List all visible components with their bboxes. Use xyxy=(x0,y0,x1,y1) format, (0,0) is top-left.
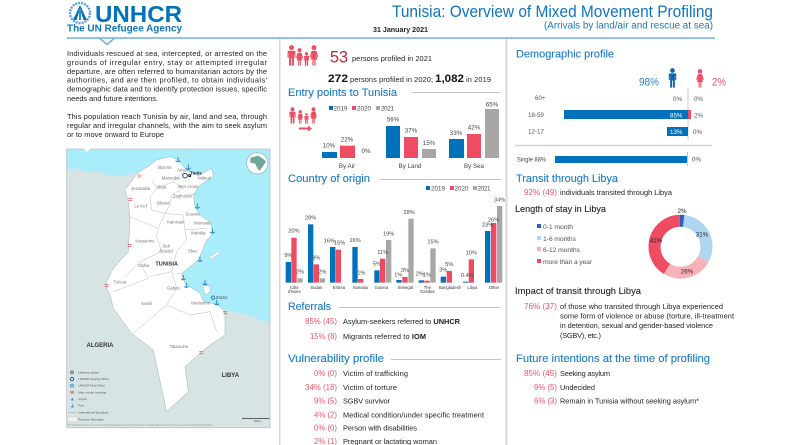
map legend: UNHCR Field Office xyxy=(78,384,105,388)
heading: country of origin: Country of origin xyxy=(288,173,370,185)
list: future intentions xyxy=(524,369,699,406)
list: vulnerability profile: Medical condition/under specific treatment xyxy=(343,410,484,420)
list: referrals: Asylum-seekers referred to UNHCR xyxy=(343,317,461,326)
map labels: Bizerte xyxy=(158,165,172,170)
map frame xyxy=(67,149,270,428)
list: referrals: Migrants referred to IOM xyxy=(343,332,426,341)
map island xyxy=(203,251,219,295)
map legend: Main border crossing xyxy=(78,390,107,394)
chart: demographic profile: 12-17 xyxy=(528,128,544,136)
bar chart: country of origin: 1% xyxy=(423,273,431,279)
bar chart: country of origin: 20% xyxy=(288,229,300,235)
map labels: Sidi xyxy=(162,243,170,248)
bar chart: country of origin: 3% xyxy=(439,268,447,274)
map labels: Gafsa xyxy=(138,263,150,268)
bar chart: entry points: 0% xyxy=(362,148,371,155)
legend: length of stay: more than a year xyxy=(543,259,593,266)
map labels: Siliana xyxy=(156,201,170,206)
bar chart: country of origin: 0.4% xyxy=(461,273,474,279)
donut chart: length of stay: 31% xyxy=(696,232,709,238)
map labels: LIBYA xyxy=(222,373,240,379)
legend: length of stay xyxy=(537,224,593,266)
legend: country of origin xyxy=(426,186,491,192)
list: vulnerability profile xyxy=(305,369,484,445)
bar chart: country of origin: 19% xyxy=(383,231,394,237)
list: vulnerability profile: 0% (0) xyxy=(314,369,337,378)
bar chart: country of origin: 28% xyxy=(403,210,415,216)
text: impact of transit: 76% (37) xyxy=(524,302,557,311)
list: future intentions: Undecided xyxy=(560,383,595,392)
donut chart: length of stay: 2% xyxy=(678,208,687,215)
donut chart: length of stay xyxy=(650,208,709,276)
bar chart: country of origin: d'Ivoire xyxy=(288,289,302,294)
bar chart: entry points xyxy=(322,102,499,170)
bar chart: country of origin: Guinea xyxy=(375,285,389,290)
bar chart: entry points: 56% xyxy=(387,116,400,124)
heading: impact of transit: Impact of transit through Libya xyxy=(515,286,642,297)
bar chart: country of origin: Libya xyxy=(467,285,478,290)
list: vulnerability profile: 0% (0) xyxy=(314,424,337,432)
map labels: Nabeul xyxy=(197,176,211,181)
chart: demographic profile: 85% xyxy=(670,112,683,120)
heading: length of stay: Length of stay in Libya xyxy=(515,204,607,215)
icon: man xyxy=(669,68,676,88)
heading: transit through Libya: Transit through Libya xyxy=(516,173,619,185)
subtitle: (Arrivals by land/air and rescue at sea) xyxy=(544,20,713,32)
text block: introduction: needs and future intentions. xyxy=(67,94,158,103)
bar chart: country of origin: Côte xyxy=(290,285,299,290)
bar chart: country of origin xyxy=(284,197,505,294)
list: future intentions: 6% (3) xyxy=(534,396,557,406)
donut chart: length of stay: 26% xyxy=(681,268,694,276)
bar chart: country of origin: 5% xyxy=(373,262,381,268)
list: vulnerability profile: Victim of trafficking xyxy=(343,369,408,378)
bar chart: country of origin: 8% xyxy=(312,255,320,261)
map labels: Manouba xyxy=(162,176,180,181)
logo wordmark: UNHCR xyxy=(95,1,182,27)
bar chart: country of origin: 11% xyxy=(377,250,388,256)
map labels: Sousse xyxy=(185,212,200,217)
bar chart: country of origin: Other xyxy=(489,285,500,290)
bar chart: country of origin: The xyxy=(424,285,432,290)
list: vulnerability profile: SGBV survivor xyxy=(343,396,391,406)
male share: 98% xyxy=(639,76,659,88)
map legend: Port xyxy=(78,404,84,408)
text block: introduction: regular and irregular channels, with the aim to seek asylum xyxy=(67,121,267,130)
bar chart: entry points: 15% xyxy=(423,140,436,147)
map labels: Jendouba xyxy=(131,186,151,191)
map labels: TUNISIA xyxy=(155,261,178,267)
text block: introduction: grounds of irregular entry, stay or attempted irregular xyxy=(67,58,268,67)
label: 2019: in 2019 xyxy=(466,75,491,84)
map: Tunisia xyxy=(67,148,270,428)
bar chart: entry points: By Land xyxy=(399,163,422,170)
bar chart: entry points: 42% xyxy=(468,124,481,132)
icon: UNHCR emblem xyxy=(70,3,90,23)
text block: introduction: demographic data and to identify protection issues, specific xyxy=(67,84,267,94)
bar chart: entry points: 33% xyxy=(450,130,463,137)
icon: woman xyxy=(696,69,704,88)
map labels: Kasserine xyxy=(135,238,155,243)
panel: profile count xyxy=(288,45,491,85)
bar chart: country of origin: 16% xyxy=(349,238,361,244)
list: referrals: 15% (8) xyxy=(310,332,337,341)
map labels: Sfax xyxy=(188,249,197,254)
map legend: 50km xyxy=(254,419,262,423)
bar chart: country of origin: 5% xyxy=(445,262,453,268)
bar chart: entry points: 22% xyxy=(341,136,354,144)
bar chart: country of origin: 2% xyxy=(296,269,304,275)
bar chart: entry points: 37% xyxy=(405,128,418,134)
map labels: Kebili xyxy=(141,301,152,306)
map labels: Zarzis xyxy=(216,295,228,300)
bar chart: country of origin: 3% xyxy=(401,268,409,274)
number: 2020: 272 xyxy=(328,73,348,85)
legend: length of stay: 1-6 months xyxy=(543,236,577,243)
bar chart: country of origin: Somalia xyxy=(353,285,369,290)
bar chart: country of origin: 23% xyxy=(482,222,493,228)
icon: border crossings xyxy=(105,175,227,354)
map labels: Ben Arous xyxy=(178,184,198,189)
map labels: ALGERIA xyxy=(87,343,114,349)
map labels: Zaghouan xyxy=(173,193,193,198)
map labels: Gabes xyxy=(167,286,180,291)
list: vulnerability profile: 34% (18) xyxy=(305,383,337,392)
bar chart: country of origin: 10% xyxy=(466,250,477,256)
legend: length of stay: 0-1 month xyxy=(543,224,573,231)
bar chart: country of origin: 16% xyxy=(324,238,335,244)
title: Tunisia: Overview of Mixed Movement Profiling xyxy=(392,3,713,21)
map labels: Le Kef xyxy=(134,204,148,209)
list: vulnerability profile: 9% (5) xyxy=(314,396,337,406)
bar chart: country of origin: 26% xyxy=(488,217,499,223)
bar chart: country of origin: 9% xyxy=(284,253,292,259)
map labels: Ariana xyxy=(177,168,190,173)
icon: ports xyxy=(176,157,219,305)
list: vulnerability profile: 4% (2) xyxy=(314,410,337,420)
map neighbouring land xyxy=(67,168,270,428)
bar chart: entry points: By Air xyxy=(339,163,355,170)
legend: entry points: 2020 xyxy=(357,106,372,112)
label: 2021: persons profiled in 2021 xyxy=(352,54,432,63)
logo: UNHCR xyxy=(67,1,182,34)
bar chart: entry points: By Sea xyxy=(464,163,485,170)
bar chart: country of origin: 15% xyxy=(334,241,345,247)
chart: demographic profile: Single 88% xyxy=(517,156,546,164)
chart: demographic profile: 0% xyxy=(693,129,702,136)
text: impact of transit: of those who transited through Libya experienced xyxy=(560,302,723,311)
chart: demographic profile: 2% xyxy=(694,112,703,120)
legend: entry points: 2019 xyxy=(334,106,348,112)
map labels: Kairouan xyxy=(167,219,185,224)
map labels: Tozeur xyxy=(113,279,127,284)
legend: country of origin: 2020 xyxy=(454,186,469,192)
legend: length of stay: 6-12 months xyxy=(543,247,581,254)
list: referrals: 85% (45) xyxy=(305,317,337,326)
chart: demographic profile: 60+ xyxy=(535,95,546,102)
bar chart: country of origin: 1% xyxy=(394,272,402,278)
heading: vulnerability profile: Vulnerability profile xyxy=(288,353,384,365)
bar chart: country of origin: 28% xyxy=(305,215,316,221)
map labels: Monastir xyxy=(194,220,211,225)
text: impact of transit xyxy=(524,302,734,340)
bar chart: country of origin: 15% xyxy=(427,240,439,246)
map labels: Béja xyxy=(157,184,167,189)
map legend: International Boundary xyxy=(78,411,109,415)
text: impact of transit: (SGBV), etc.) xyxy=(560,331,601,340)
list: future intentions: Remain in Tunisia without seeking asylum* xyxy=(560,396,699,406)
list: future intentions: Seeking asylum xyxy=(560,369,610,378)
number: 2019: 1,082 xyxy=(435,73,464,85)
donut chart: length of stay: 41% xyxy=(650,238,663,244)
text: transit share: individuals transited through Libya xyxy=(560,188,673,197)
chart: demographic profile: 0% xyxy=(694,96,703,103)
female share: 2% xyxy=(712,76,726,88)
text: transit share: 92% (49) xyxy=(524,188,557,197)
map legend: The boundaries and names shown and the designations used on this map do not imply official endorsement or acceptance by the United Nations. xyxy=(67,423,214,426)
legend: entry points xyxy=(329,106,395,112)
number: 2021: 53 xyxy=(330,48,348,66)
chart: demographic profile: 0% xyxy=(692,156,701,164)
heading: demographic profile: Demographic profile xyxy=(516,48,614,60)
map labels xyxy=(87,165,240,379)
list: future intentions: 85% (45) xyxy=(524,369,557,378)
icon: family moving xyxy=(289,107,317,132)
chart: demographic profile: 18-59 xyxy=(528,112,544,119)
bar chart: country of origin: 2% xyxy=(416,272,424,278)
heading: entry points: Entry points to Tunisia xyxy=(288,87,398,99)
bar chart: country of origin: 1% xyxy=(357,270,365,276)
map Tunisia territory xyxy=(105,157,225,412)
map legend: UNHCR Country Office xyxy=(78,377,109,381)
icon: family xyxy=(288,45,318,66)
map legend: National capital xyxy=(78,370,99,374)
bar chart: country of origin: Gambia xyxy=(420,289,435,294)
bar chart: country of origin: Eritrea xyxy=(333,285,346,290)
legend: country of origin: 2019 xyxy=(431,186,446,192)
map legend: Province Boundary xyxy=(78,417,104,421)
bar chart: country of origin: Sudan xyxy=(310,285,323,290)
date: 31 January 2021 xyxy=(373,25,428,34)
list: vulnerability profile: Person with disabilities xyxy=(343,424,417,432)
heading: referrals: Referrals xyxy=(288,301,331,313)
text: impact of transit: in detention, sexual and gender-based violence xyxy=(560,321,713,330)
icon: UNHCR offices xyxy=(183,173,215,299)
legend: entry points: 2021 xyxy=(381,106,395,112)
bar chart: entry points: 10% xyxy=(323,142,336,150)
icon: Africa inset xyxy=(247,153,268,174)
map labels: Tataouine xyxy=(170,344,189,349)
map labels: Mahdia xyxy=(191,230,206,235)
bar chart: country of origin: Senegal xyxy=(398,285,413,290)
map labels: Bouzid xyxy=(159,248,173,253)
text block: introduction: or to move onward to Europe xyxy=(67,130,164,139)
heading: future intentions: Future intentions at the time of profiling xyxy=(516,353,710,365)
chart: demographic profile xyxy=(515,68,726,166)
map legend xyxy=(67,370,269,426)
text: impact of transit: some form of violence or abuse (torture, ill-treatment xyxy=(560,312,734,320)
list: vulnerability profile: Victim of torture xyxy=(343,383,397,392)
map sea xyxy=(67,149,270,428)
bar chart: entry points: 65% xyxy=(486,102,499,108)
text block: introduction: This population reach Tunisia by air, land and sea, through xyxy=(67,112,267,121)
list: future intentions: 9% (5) xyxy=(534,383,557,392)
text block: introduction: departure, are often referred to humanitarian actors by the xyxy=(67,67,267,76)
map labels: Tunis xyxy=(190,170,202,175)
text block: introduction: authorities, and are then profiled, to obtain individuals' xyxy=(67,76,268,84)
text block: introduction: Individuals rescued at sea, intercepted, or arrested on the xyxy=(67,49,267,58)
list: referrals xyxy=(305,317,461,341)
logo tagline: The UN Refugee Agency xyxy=(67,24,182,34)
map labels: Medenine xyxy=(191,301,211,306)
chart: demographic profile: 13% xyxy=(670,129,683,136)
label: 2020: persons profiled in 2020; xyxy=(350,75,433,84)
header rule xyxy=(67,38,715,44)
legend: country of origin: 2021 xyxy=(478,186,491,192)
chart: demographic profile: 0% xyxy=(673,96,682,103)
text block: introduction xyxy=(67,49,268,139)
bar chart: country of origin: 34% xyxy=(494,197,505,203)
bar chart: country of origin: 2% xyxy=(318,269,326,275)
bar chart: country of origin: Bangladesh xyxy=(439,285,462,290)
map legend: Airport xyxy=(78,397,87,401)
